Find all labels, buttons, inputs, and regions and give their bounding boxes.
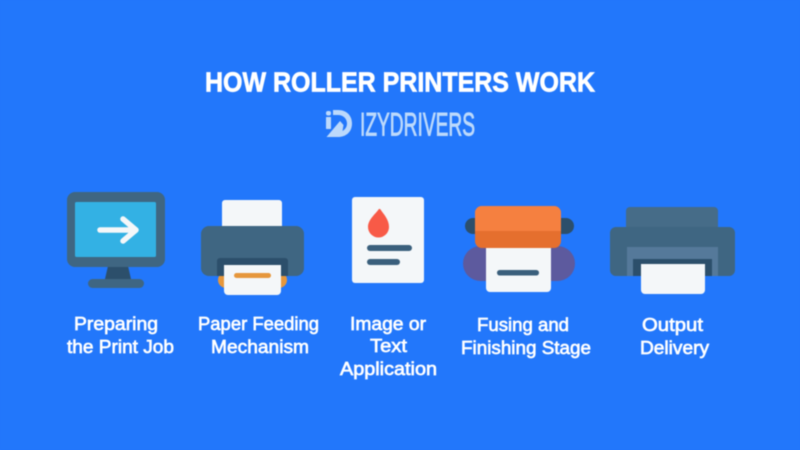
logo: IzyDrivers [326,106,475,142]
label: Image or [350,314,426,334]
label: Mechanism [211,337,309,357]
step 5: output delivery [610,207,735,358]
logo icon [326,110,352,137]
step 2: paper feeding mechanism [198,200,319,357]
label [461,315,591,358]
label: Text [370,336,407,356]
step 3: image or text application [340,197,437,379]
icon: printer with output page [610,207,735,294]
label: Output [642,315,703,335]
icon: fuser rollers [463,206,575,292]
icon: monitor with arrow [67,192,165,288]
step 1: preparing the print job [67,192,174,357]
label: the Print Job [67,337,174,357]
label: Finishing Stage [461,338,591,358]
label: Paper Feeding [198,314,319,334]
icon: printer feeding paper [201,200,304,295]
label [640,315,709,358]
step 4: fusing and finishing stage [461,206,591,358]
title: HOW ROLLER PRINTERS WORK [205,66,595,98]
label: Fusing and [477,315,569,335]
label [340,314,437,379]
label: Preparing [74,314,158,334]
label: Application [340,359,437,379]
icon: document with ink drop [352,197,424,283]
label [198,314,319,357]
logo wordmark: IZYDRIVERS [360,106,475,142]
label [67,314,174,357]
label: Delivery [640,338,709,358]
